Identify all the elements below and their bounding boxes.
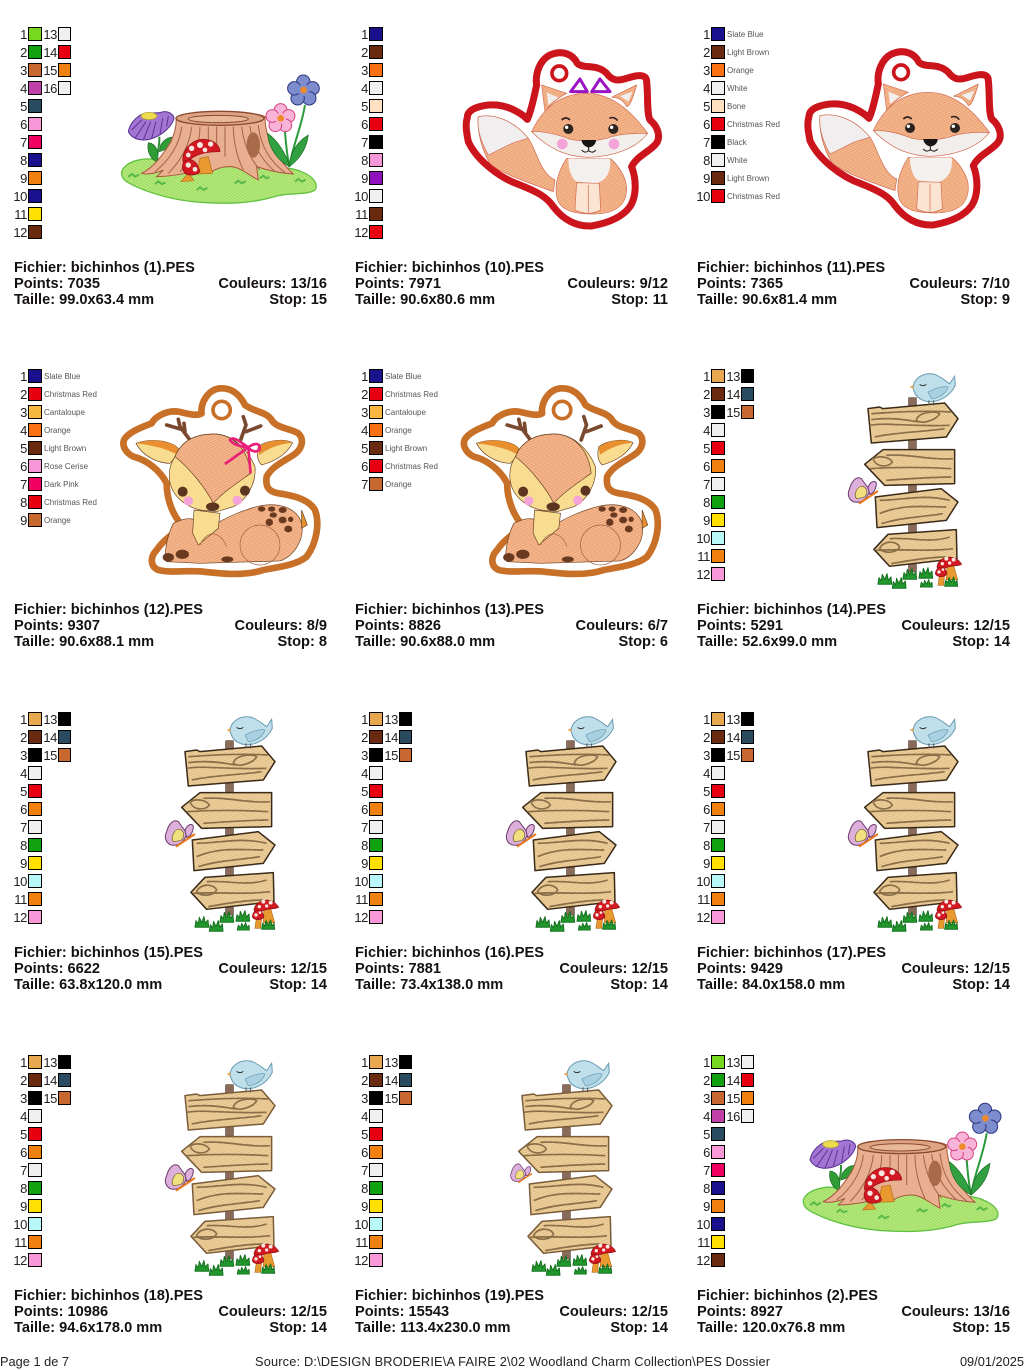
color swatches with thread names: Cantaloupe: [44, 408, 85, 417]
color swatches with thread names: Dark Pink: [44, 480, 80, 489]
color swatches with thread names: Black: [727, 138, 748, 147]
color swatches: 6: [703, 1145, 710, 1160]
color swatches: 9: [20, 856, 27, 871]
color swatches: 9: [361, 171, 368, 186]
color swatches: 3: [20, 1091, 27, 1106]
file info: [697, 945, 1011, 993]
color swatches with thread names: Orange: [44, 516, 71, 525]
color swatches: 4: [20, 81, 27, 96]
file info: Points: 8826: [355, 618, 441, 634]
color swatches: 10: [696, 874, 710, 889]
color swatches: 12: [354, 225, 368, 240]
color swatches: 13: [726, 1055, 740, 1070]
color swatches: 15: [43, 1091, 57, 1106]
color swatches: 14: [43, 1073, 57, 1088]
color swatches: 2: [20, 730, 27, 745]
color swatches: 1: [20, 1055, 27, 1070]
file info: Points: 7971: [355, 276, 441, 292]
file info: Stop: 15: [269, 292, 327, 308]
color swatches: 8: [20, 153, 27, 168]
file info: Fichier: bichinhos (10).PES: [355, 260, 544, 276]
color swatches: 11: [355, 892, 368, 907]
color swatches: 8: [703, 838, 710, 853]
color swatches: 2: [361, 1073, 368, 1088]
panel: bichinhos (19): [354, 1055, 669, 1336]
file info: Fichier: bichinhos (12).PES: [14, 602, 203, 618]
color swatches with thread names: Christmas Red: [385, 390, 438, 399]
embroidery: wooden signpost with bird, butterfly, mushroom: [506, 717, 620, 931]
color swatches with thread names: Christmas Red: [727, 192, 780, 201]
file info: Fichier: bichinhos (13).PES: [355, 602, 544, 618]
color swatches: 12: [354, 1253, 368, 1268]
file info: Stop: 14: [610, 1320, 669, 1336]
color swatches: 11: [14, 1235, 27, 1250]
color swatches with thread names: Orange: [44, 426, 71, 435]
color swatches: [354, 1055, 412, 1268]
color swatches: 13: [726, 712, 740, 727]
color swatches with thread names: 5: [20, 441, 27, 456]
file info: [355, 945, 669, 993]
file info: Stop: 14: [269, 977, 328, 993]
color swatches with thread names: Christmas Red: [385, 462, 438, 471]
file info: Fichier: bichinhos (19).PES: [355, 1288, 544, 1304]
color swatches: 10: [696, 1217, 710, 1232]
color swatches with thread names: Bone: [727, 102, 746, 111]
file info: Taille: 90.6x88.1 mm: [14, 634, 154, 650]
color swatches: 8: [20, 1181, 27, 1196]
color swatches: 6: [361, 1145, 368, 1160]
color swatches: 3: [361, 1091, 368, 1106]
color swatches: 15: [384, 748, 398, 763]
color swatches: 11: [697, 1235, 710, 1250]
color swatches: [354, 712, 412, 925]
color swatches with thread names: 3: [20, 405, 27, 420]
color swatches: 13: [384, 1055, 398, 1070]
color swatches with thread names: 7: [361, 477, 368, 492]
color swatches: 5: [361, 784, 368, 799]
color swatches with thread names: White: [727, 84, 748, 93]
color swatches: 8: [20, 838, 27, 853]
embroidery: fox charm with bow: [466, 53, 659, 226]
color swatches with thread names: Light Brown: [44, 444, 86, 453]
panel: bichinhos (13): [355, 369, 668, 650]
color swatches: 2: [20, 45, 27, 60]
color swatches: 1: [361, 27, 368, 42]
color swatches: 6: [703, 459, 710, 474]
color swatches with thread names: 1: [703, 27, 710, 42]
panel: bichinhos (2): [696, 1055, 1010, 1336]
panel: bichinhos (16): [354, 712, 669, 993]
color swatches: 8: [361, 838, 368, 853]
color swatches: 16: [43, 81, 57, 96]
color swatches with thread names: Light Brown: [727, 48, 769, 57]
embroidery: wooden signpost with bird, butterfly, mushroom: [165, 1061, 279, 1275]
color swatches with thread names: 5: [361, 441, 368, 456]
color swatches: 12: [13, 1253, 27, 1268]
color swatches: 3: [20, 63, 27, 78]
file info: Couleurs: 12/15: [559, 1304, 668, 1320]
file info: Stop: 11: [611, 292, 668, 308]
color swatches with thread names: 4: [20, 423, 27, 438]
color swatches: 14: [726, 1073, 740, 1088]
file info: Points: 9429: [697, 961, 783, 977]
color swatches: 10: [354, 874, 368, 889]
file info: Stop: 14: [952, 977, 1011, 993]
color swatches: 1: [703, 1055, 710, 1070]
color swatches with thread names: 7: [20, 477, 27, 492]
file info: [14, 945, 328, 993]
color swatches with thread names: Orange: [385, 426, 412, 435]
color swatches: 2: [20, 1073, 27, 1088]
color swatches: [696, 712, 754, 925]
file info: [14, 602, 327, 650]
file info: Stop: 15: [952, 1320, 1010, 1336]
footer: 09/01/2025: [960, 1354, 1024, 1369]
color swatches: 7: [20, 820, 27, 835]
color swatches: 5: [20, 99, 27, 114]
color swatches: 6: [361, 117, 368, 132]
color swatches: 15: [43, 748, 57, 763]
color swatches: 4: [703, 423, 710, 438]
color swatches: 3: [703, 405, 710, 420]
color swatches: 2: [361, 730, 368, 745]
color swatches: [13, 27, 70, 240]
color swatches with thread names: [20, 369, 97, 528]
color swatches: [13, 1055, 70, 1268]
color swatches with thread names: Slate Blue: [385, 372, 422, 381]
color swatches: 9: [703, 513, 710, 528]
file info: [697, 260, 1010, 308]
color swatches: 14: [384, 1073, 398, 1088]
color swatches: 5: [20, 784, 27, 799]
file info: Points: 8927: [697, 1304, 783, 1320]
color swatches: 10: [13, 1217, 27, 1232]
panel: bichinhos (18): [13, 1055, 328, 1336]
color swatches: 9: [361, 1199, 368, 1214]
embroidery: tree stump with flowers: [122, 75, 319, 203]
color swatches with thread names: 6: [703, 117, 710, 132]
file info: [14, 1288, 328, 1336]
file info: Points: 7881: [355, 961, 441, 977]
color swatches: 15: [726, 748, 740, 763]
color swatches: 14: [726, 730, 740, 745]
embroidery: wooden signpost with bird, small butterfly, mushroom: [511, 1061, 616, 1275]
color swatches: 12: [696, 567, 710, 582]
color swatches: 16: [726, 1109, 740, 1124]
color swatches: 10: [13, 189, 27, 204]
color swatches: 9: [361, 856, 368, 871]
color swatches: 5: [703, 441, 710, 456]
color swatches: 1: [20, 27, 27, 42]
color swatches: 12: [13, 225, 27, 240]
color swatches: 6: [20, 1145, 27, 1160]
color swatches with thread names: Rose Cerise: [44, 462, 89, 471]
panel: bichinhos (1): [13, 27, 327, 308]
color swatches: 8: [703, 1181, 710, 1196]
color swatches: [13, 712, 70, 925]
file info: [697, 1288, 1010, 1336]
panel: bichinhos (14): [696, 369, 1011, 650]
color swatches: [354, 27, 382, 240]
color swatches: 2: [703, 730, 710, 745]
color swatches: 10: [13, 874, 27, 889]
color swatches with thread names: [361, 369, 438, 492]
file info: Taille: 90.6x80.6 mm: [355, 292, 495, 308]
color swatches: 4: [703, 1109, 710, 1124]
color swatches: 5: [703, 1127, 710, 1142]
color swatches with thread names: Christmas Red: [44, 390, 97, 399]
color swatches: 11: [14, 207, 27, 222]
file info: Couleurs: 6/7: [576, 618, 668, 634]
color swatches: 12: [13, 910, 27, 925]
color swatches: 15: [726, 1091, 740, 1106]
file info: Fichier: bichinhos (18).PES: [14, 1288, 203, 1304]
file info: Fichier: bichinhos (14).PES: [697, 602, 886, 618]
file info: Stop: 8: [278, 634, 327, 650]
color swatches: 10: [354, 189, 368, 204]
color swatches: 13: [384, 712, 398, 727]
file info: Couleurs: 12/15: [901, 961, 1010, 977]
color swatches: 8: [361, 153, 368, 168]
color swatches: 15: [43, 63, 57, 78]
color swatches with thread names: [696, 27, 780, 204]
color swatches: 11: [355, 1235, 368, 1250]
footer: Page 1 de 7: [0, 1354, 69, 1369]
color swatches with thread names: 9: [20, 513, 27, 528]
color swatches with thread names: White: [727, 156, 748, 165]
footer: Source: D:\DESIGN BRODERIE\A FAIRE 2\02 Woodland Charm Collection\PES Dossier: [255, 1354, 771, 1369]
file info: [355, 1288, 669, 1336]
color swatches: 3: [20, 748, 27, 763]
color swatches: 2: [361, 45, 368, 60]
color swatches with thread names: 2: [20, 387, 27, 402]
color swatches: 13: [43, 712, 57, 727]
file info: Taille: 63.8x120.0 mm: [14, 977, 162, 993]
file info: Couleurs: 13/16: [901, 1304, 1010, 1320]
color swatches: 9: [703, 1199, 710, 1214]
panel: bichinhos (10): [354, 27, 668, 308]
footer: [0, 1354, 1024, 1369]
color swatches: 7: [20, 135, 27, 150]
file info: Taille: 120.0x76.8 mm: [697, 1320, 845, 1336]
file info: Taille: 99.0x63.4 mm: [14, 292, 154, 308]
file info: Points: 10986: [14, 1304, 108, 1320]
file info: Fichier: bichinhos (2).PES: [697, 1288, 878, 1304]
color swatches: 7: [20, 1163, 27, 1178]
color swatches with thread names: 6: [361, 459, 368, 474]
color swatches: 3: [703, 1091, 710, 1106]
color swatches: 9: [703, 856, 710, 871]
file info: Fichier: bichinhos (17).PES: [697, 945, 886, 961]
color swatches with thread names: 3: [703, 63, 710, 78]
color swatches: 1: [361, 1055, 368, 1070]
color swatches with thread names: Light Brown: [727, 174, 769, 183]
embroidery: wooden signpost with bird, butterfly, mushroom: [165, 717, 279, 931]
file info: Stop: 14: [952, 634, 1011, 650]
color swatches: 10: [354, 1217, 368, 1232]
file info: Points: 7035: [14, 276, 100, 292]
color swatches: 4: [20, 1109, 27, 1124]
color swatches with thread names: 8: [20, 495, 27, 510]
color swatches: 6: [20, 802, 27, 817]
color swatches: 1: [703, 712, 710, 727]
file info: Couleurs: 12/15: [901, 618, 1010, 634]
color swatches: 13: [43, 27, 57, 42]
color swatches: 5: [703, 784, 710, 799]
color swatches with thread names: 5: [703, 99, 710, 114]
file info: Fichier: bichinhos (16).PES: [355, 945, 544, 961]
color swatches: 3: [361, 748, 368, 763]
file info: Fichier: bichinhos (15).PES: [14, 945, 203, 961]
color swatches: 12: [696, 1253, 710, 1268]
color swatches with thread names: Slate Blue: [727, 30, 764, 39]
color swatches: 15: [384, 1091, 398, 1106]
color swatches with thread names: 4: [703, 81, 710, 96]
color swatches: [696, 1055, 754, 1268]
file info: Fichier: bichinhos (1).PES: [14, 260, 195, 276]
color swatches: 7: [703, 820, 710, 835]
color swatches with thread names: 3: [361, 405, 368, 420]
color swatches: 7: [361, 820, 368, 835]
color swatches: 13: [726, 369, 740, 384]
embroidery: deer charm with bow: [123, 388, 317, 574]
embroidery: tree stump with flowers: [803, 1103, 1001, 1231]
color swatches: 12: [354, 910, 368, 925]
file info: Taille: 52.6x99.0 mm: [697, 634, 837, 650]
color swatches: 11: [697, 549, 710, 564]
color swatches with thread names: 7: [703, 135, 710, 150]
color swatches: 7: [361, 135, 368, 150]
color swatches: 4: [361, 766, 368, 781]
color swatches: 11: [14, 892, 27, 907]
color swatches: 7: [703, 1163, 710, 1178]
color swatches: 9: [20, 171, 27, 186]
panel: bichinhos (15): [13, 712, 328, 993]
panel: bichinhos (11): [696, 27, 1010, 308]
file info: Stop: 14: [610, 977, 669, 993]
color swatches with thread names: Slate Blue: [44, 372, 81, 381]
file info: Couleurs: 13/16: [218, 276, 327, 292]
color swatches: 14: [43, 730, 57, 745]
color swatches: 6: [703, 802, 710, 817]
color swatches: 12: [696, 910, 710, 925]
color swatches with thread names: Orange: [385, 480, 412, 489]
color swatches with thread names: Orange: [727, 66, 754, 75]
color swatches: 7: [703, 477, 710, 492]
file info: [355, 602, 668, 650]
color swatches: 4: [361, 81, 368, 96]
color swatches with thread names: Christmas Red: [727, 120, 780, 129]
color swatches with thread names: 1: [20, 369, 27, 384]
file info: Stop: 6: [619, 634, 668, 650]
color swatches: 2: [703, 387, 710, 402]
file info: Couleurs: 12/15: [218, 961, 327, 977]
color swatches: 14: [384, 730, 398, 745]
color swatches with thread names: 2: [703, 45, 710, 60]
file info: Points: 9307: [14, 618, 100, 634]
file info: Couleurs: 12/15: [559, 961, 668, 977]
file info: [355, 260, 668, 308]
color swatches: 4: [361, 1109, 368, 1124]
color swatches: 1: [361, 712, 368, 727]
color swatches: 3: [361, 63, 368, 78]
panel: bichinhos (12): [14, 369, 327, 650]
color swatches: 7: [361, 1163, 368, 1178]
file info: Taille: 84.0x158.0 mm: [697, 977, 845, 993]
file info: Points: 15543: [355, 1304, 449, 1320]
color swatches: 1: [20, 712, 27, 727]
file info: Taille: 73.4x138.0 mm: [355, 977, 503, 993]
color swatches with thread names: Christmas Red: [44, 498, 97, 507]
color swatches with thread names: Cantaloupe: [385, 408, 426, 417]
panel: bichinhos (17): [696, 712, 1011, 993]
color swatches: 5: [20, 1127, 27, 1142]
file info: Points: 5291: [697, 618, 783, 634]
embroidery: wooden signpost with bird, butterfly, mushroom: [848, 717, 962, 931]
color swatches: 4: [20, 766, 27, 781]
color swatches: 13: [43, 1055, 57, 1070]
file info: Taille: 90.6x88.0 mm: [355, 634, 495, 650]
color swatches: 11: [697, 892, 710, 907]
color swatches with thread names: 1: [361, 369, 368, 384]
color swatches: 4: [703, 766, 710, 781]
color swatches: 14: [726, 387, 740, 402]
file info: [14, 260, 327, 308]
file info: Taille: 113.4x230.0 mm: [355, 1320, 511, 1336]
color swatches: 11: [355, 207, 368, 222]
color swatches: 2: [703, 1073, 710, 1088]
color swatches: 5: [361, 1127, 368, 1142]
color swatches: 15: [726, 405, 740, 420]
file info: Taille: 94.6x178.0 mm: [14, 1320, 162, 1336]
file info: Stop: 14: [269, 1320, 328, 1336]
file info: Points: 7365: [697, 276, 783, 292]
file info: Fichier: bichinhos (11).PES: [697, 260, 885, 276]
file info: Stop: 9: [961, 292, 1010, 308]
embroidery: deer charm: [464, 388, 658, 574]
color swatches: 6: [20, 117, 27, 132]
embroidery: fox charm: [808, 52, 1000, 225]
file info: Taille: 90.6x81.4 mm: [697, 292, 837, 308]
color swatches with thread names: 4: [361, 423, 368, 438]
color swatches with thread names: 10: [696, 189, 710, 204]
color swatches with thread names: 8: [703, 153, 710, 168]
color swatches: 8: [361, 1181, 368, 1196]
color swatches: 3: [703, 748, 710, 763]
color swatches: 9: [20, 1199, 27, 1214]
color swatches with thread names: 9: [703, 171, 710, 186]
file info: Couleurs: 8/9: [235, 618, 327, 634]
embroidery: wooden signpost with bird, butterfly, mushroom: [848, 374, 962, 588]
color swatches: 5: [361, 99, 368, 114]
color swatches: 6: [361, 802, 368, 817]
color swatches: 8: [703, 495, 710, 510]
color swatches: [696, 369, 754, 582]
file info: Couleurs: 12/15: [218, 1304, 327, 1320]
file info: Couleurs: 9/12: [567, 276, 668, 292]
color swatches: 1: [703, 369, 710, 384]
color swatches: 10: [696, 531, 710, 546]
color swatches with thread names: Light Brown: [385, 444, 427, 453]
color swatches with thread names: 2: [361, 387, 368, 402]
color swatches with thread names: 6: [20, 459, 27, 474]
file info: [697, 602, 1011, 650]
file info: Couleurs: 7/10: [909, 276, 1010, 292]
file info: Points: 6622: [14, 961, 100, 977]
color swatches: 14: [43, 45, 57, 60]
